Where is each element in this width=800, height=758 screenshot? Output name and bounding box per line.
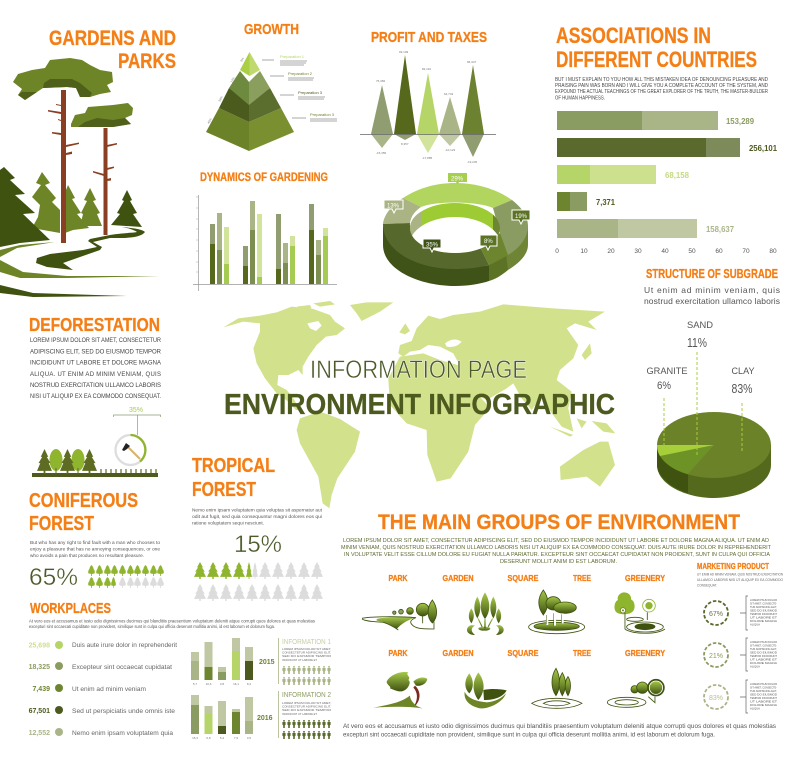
- labels: environment groups row 2: PARK: [388, 648, 408, 658]
- chart: dynamics of gardening bars: [193, 195, 337, 291]
- heading: deforestation: DEFORESTATION: [29, 315, 160, 335]
- chart: growth pyramid: 9%: [239, 56, 245, 62]
- text: coniferous paragraph: enjoy a pleasure that has no annoying consequences, or one: [30, 546, 161, 552]
- text: subgrade description: Ut enim ad minim veniam, quis: [644, 285, 780, 295]
- panel: information 1: INFORMATION 1: [282, 639, 331, 646]
- labels: subgrade pie: CLAY: [732, 366, 754, 376]
- chart: marketing rings: LOREM IPSUM DOLOR: [750, 598, 777, 602]
- heading: the main groups of environment: THE MAIN GROUPS OF ENVIRONMENT: [378, 511, 740, 534]
- chart: workplaces 2015 and 2016 bars: 16,1: [233, 682, 239, 686]
- chart: marketing rings: TEMPOR INCIDIDUNT: [750, 654, 777, 658]
- panel: information 2: CONSECTETUR ADIPISCING ELIT,: [282, 704, 331, 708]
- stat: 65 percent: 65%: [29, 564, 78, 591]
- chart: marketing rings: ALIQUA: [750, 664, 760, 668]
- chart: associations horizontal bars: 7,371: [596, 198, 616, 207]
- chart: associations horizontal bars: 158,637: [706, 225, 735, 234]
- icon: deforestation trees and axe: 35%: [129, 407, 143, 414]
- labels: subgrade pie: GRANITE: [646, 366, 688, 376]
- heading: gardens and parks: [49, 27, 176, 73]
- chart: marketing rings: SIT AMET, CONSECTE-: [750, 686, 777, 690]
- text: main groups paragraph: IN VOLUPTATE VELIT ESSE CILLUM DOLORE EU FUGIAT NULLA PARIATUR. EXCEPTEUR SINT OCCAECAT CUPIDATAT NON PROIDENT, SUNT IN CULPA QUI OFFICIA: [344, 552, 770, 558]
- chart: marketing rings: 67%: [709, 611, 723, 618]
- chart: marketing rings: LOREM IPSUM DOLOR: [750, 682, 777, 686]
- chart: workplaces 2015 and 2016 bars: 2015: [259, 659, 275, 666]
- chart: growth pyramid: Preparation 3: [298, 90, 323, 95]
- panel: information 1: LOREM IPSUM DOLOR SIT AMET,: [282, 647, 331, 651]
- heading: marketing product: MARKETING PRODUCT: [697, 562, 769, 571]
- icon: park path with trees: [362, 600, 437, 630]
- list: workplaces figures: [29, 641, 177, 737]
- chart: profit and taxes peaks: 76,382: [376, 79, 386, 83]
- chart: workplaces 2015 and 2016 bars: [191, 638, 275, 740]
- chart: workplaces 2015 and 2016 bars: 7,9: [234, 736, 238, 740]
- icon row: coniferous trees 65 percent: [88, 565, 164, 588]
- labels: environment groups row 2: GREENERY: [625, 648, 665, 658]
- heading: associations in different countries: ASSOCIATIONS IN: [556, 23, 711, 48]
- list: workplaces figures: 25,698: [29, 642, 50, 650]
- labels: environment groups row 1: PARK: [388, 573, 408, 583]
- chart: marketing rings: LOREM IPSUM DOLOR: [750, 640, 777, 644]
- chart: associations horizontal bars: 70: [742, 248, 750, 255]
- text: coniferous paragraph: But who has any right to find fault with a man who chooses to: [30, 540, 161, 545]
- heading: growth: GROWTH: [244, 21, 299, 38]
- chart: associations horizontal bars: 153,289: [726, 117, 755, 126]
- text: tropical paragraph: [192, 508, 323, 526]
- chart: associations horizontal bars: 50: [688, 248, 696, 255]
- chart: growth pyramid: Preparation 2: [288, 71, 313, 76]
- icon row: tropical trees 15 percent: [194, 562, 323, 601]
- panel: information 1: [278, 638, 332, 685]
- chart: 3D donut: 8%: [484, 239, 493, 245]
- stat: 15 percent: 15%: [234, 531, 282, 558]
- chart: profit and taxes peaks: -10,123: [445, 148, 456, 152]
- chart: workplaces 2015 and 2016 bars: 15,3: [192, 736, 198, 740]
- chart: marketing rings: TEMPOR INCIDIDUNT: [750, 612, 777, 616]
- chart: marketing rings: UT LABORE ET: [750, 616, 777, 620]
- panel: information 2: INFORMATION 2: [282, 692, 331, 699]
- panel: information 1: SED DO EIUSMOD TEMPOR: [282, 654, 332, 658]
- icon: garden leaves and hill: [465, 672, 507, 708]
- chart: marketing rings: SIT AMET, CONSECTE-: [750, 644, 777, 648]
- text: subgrade description: nostrud exercitation ullamco laboris: [644, 296, 780, 306]
- text: workplaces paragraph: At vero eos et accusamus et iusto odio dignissimos ducimus qui blanditiis praesentium voluptatum deleniti atque corrupti quos dolores et quas molestias: [29, 618, 316, 624]
- list: workplaces figures: Duis aute irure dolor in reprehenderit: [72, 642, 177, 649]
- illustration: pine trees and winding path: [0, 58, 160, 297]
- text: main groups paragraph: MINIM VENIAM, QUIS NOSTRUD EXERCITATION ULLAMCO LABORIS NISI UT ALIQUIP EX EA COMMODO CONSEQUAT. DUIS AUTE IRURE DOLOR IN REPREHENDERIT: [341, 545, 772, 551]
- icon: greenery round trees: [615, 592, 665, 633]
- list: workplaces figures: 12,552: [29, 730, 50, 737]
- icons: environment groups: [362, 590, 665, 708]
- heading: tropical forest: FOREST: [192, 479, 256, 501]
- chart: growth pyramid: 45%: [206, 117, 213, 124]
- panel: information 2: LOREM IPSUM DOLOR SIT AMET,: [282, 701, 331, 705]
- chart: associations horizontal bars: 40: [661, 248, 669, 255]
- labels: environment groups row 1: [388, 573, 665, 583]
- list: workplaces figures: 18,325: [29, 664, 50, 671]
- labels: environment groups row 2: [388, 648, 665, 658]
- chart: associations horizontal bars: 68,158: [665, 171, 690, 180]
- chart: subgrade 3D pie: [657, 352, 771, 498]
- chart: growth pyramid: [206, 52, 337, 151]
- text: main groups footer paragraph: [343, 723, 776, 738]
- chart: marketing rings: TUR ADIPISCING ELIT,: [750, 689, 777, 693]
- chart: marketing rings: TUR ADIPISCING ELIT,: [750, 647, 777, 651]
- title: information page: INFORMATION PAGE: [310, 356, 527, 384]
- chart: associations horizontal bars: 30: [634, 248, 642, 255]
- chart: marketing rings: SED DO EIUSMOD: [750, 692, 777, 696]
- labels: environment groups row 2: TREE: [573, 648, 591, 658]
- text: marketing paragraph: ULLAMCO LABORIS NISI UT ALIQUIP EX EA COMMODO: [697, 578, 783, 582]
- chart: marketing rings: TEMPOR INCIDIDUNT: [750, 696, 777, 700]
- text: deforestation paragraph: NOSTRUD EXERCITATION ULLAMCO LABORIS: [30, 383, 161, 389]
- text: deforestation paragraph: ADIPISCING ELIT, SED DO EIUSMOD TEMPOR: [30, 350, 162, 356]
- chart: profit and taxes peaks: [360, 50, 496, 164]
- chart: workplaces 2015 and 2016 bars: 5,7: [193, 682, 197, 686]
- chart: marketing rings: SED DO EIUSMOD: [750, 650, 777, 654]
- map: world map: [223, 301, 615, 508]
- chart: workplaces 2015 and 2016 bars: 3,5: [247, 736, 251, 740]
- chart: associations horizontal bars: 60: [715, 248, 723, 255]
- chart: associations horizontal bars: 0: [555, 248, 559, 255]
- chart: marketing rings: 83%: [709, 695, 723, 702]
- list: workplaces figures: Ut enim ad minim veniam: [72, 686, 146, 693]
- labels: subgrade pie: 11%: [687, 335, 707, 350]
- heading: coniferous forest: CONIFEROUS: [29, 490, 138, 512]
- heading: gardens and parks: GARDENS AND: [49, 27, 176, 50]
- chart: profit and taxes peaks: -17,885: [422, 156, 433, 160]
- chart: 3D donut: 13%: [387, 204, 400, 210]
- text: coniferous paragraph: [30, 540, 161, 558]
- icon: square with trees: [529, 590, 585, 634]
- heading: coniferous forest: FOREST: [29, 513, 94, 535]
- chart: marketing rings: SIT AMET, CONSECTE-: [750, 602, 777, 606]
- chart: marketing rings: ALIQUA: [750, 622, 760, 626]
- text: coniferous paragraph: who avoids a pain that produces no resultant pleasure.: [30, 553, 144, 558]
- chart: marketing rings: SED DO EIUSMOD: [750, 608, 777, 612]
- panel: information 2: [278, 691, 332, 739]
- chart: marketing rings: DOLORE MAGNA: [750, 703, 777, 707]
- labels: subgrade pie: 83%: [732, 381, 753, 396]
- icon: square leaves and eye ground: [532, 668, 582, 708]
- chart: 3D donut: 35%: [426, 242, 439, 248]
- chart: profit and taxes peaks: 64,743: [444, 92, 454, 96]
- text: associations paragraph: BUT I MUST EXPLAIN TO YOU HOW ALL THIS MISTAKEN IDEA OF DENOUNCING PLEASURE AND: [555, 77, 768, 83]
- chart: marketing rings: UT LABORE ET: [750, 700, 777, 704]
- text: workplaces paragraph: [29, 618, 316, 629]
- labels: environment groups row 1: TREE: [573, 573, 591, 583]
- chart: profit and taxes peaks: 96,347: [467, 60, 477, 64]
- chart: growth pyramid: 17%: [229, 76, 236, 84]
- text: main groups footer paragraph: At vero eos et accusamus et iusto odio dignissimos ducimus qui blanditiis praesentium voluptatum deleniti atque corrupti quos dolores et quas molestias: [343, 723, 776, 730]
- icon: greenery circles and spiral path: [607, 679, 664, 707]
- chart: growth pyramid: 36%: [217, 95, 224, 102]
- text: marketing paragraph: UT ENIM AD MINIM VENIAM, QUIS NOSTRUD EXERCITATION: [697, 572, 784, 576]
- chart: profit and taxes peaks: 8,357: [401, 142, 409, 146]
- chart: workplaces 2015 and 2016 bars: 3,8: [220, 682, 224, 686]
- text: tropical paragraph: odit aut fugit, sed quia consequuntur magni dolores eos qui: [192, 514, 322, 519]
- icon: garden trees: [467, 592, 504, 635]
- chart: growth pyramid: Preparation 1: [280, 54, 305, 59]
- list: workplaces figures: Nemo enim ipsam voluptatem quia: [72, 730, 173, 737]
- text: deforestation paragraph: LOREM IPSUM DOLOR SIT AMET, CONSECTETUR: [30, 338, 162, 344]
- text: main groups footer paragraph: excepturi sint occaecati cupiditate non provident, similique sunt in culpa qui officia deserunt mollitia animi, id est laborum et dolorum fuga.: [343, 732, 715, 738]
- text: deforestation paragraph: ALIQUA. UT ENIM AD MINIM VENIAM, QUIS: [30, 372, 161, 378]
- text: deforestation paragraph: [30, 338, 162, 400]
- labels: subgrade pie: SAND: [687, 320, 714, 330]
- text: associations paragraph: PRAISING PAIN WAS BORN AND I WILL GIVE YOU A COMPLETE ACCOUNT OF THE SYSTEM, AND: [555, 83, 768, 89]
- text: main groups paragraph: [341, 538, 772, 565]
- heading: tropical forest: TROPICAL: [192, 455, 275, 477]
- text: deforestation paragraph: INCIDIDUNT UT LABORE ET DOLORE MAGNA: [30, 360, 161, 366]
- labels: environment groups row 2: SQUARE: [508, 648, 539, 658]
- text: tropical paragraph: ratione voluptatem sequi nesciunt.: [192, 520, 264, 526]
- heading: associations in different countries: [556, 23, 757, 72]
- heading: coniferous forest: [29, 490, 138, 535]
- text: associations paragraph: [555, 77, 768, 102]
- text: workplaces paragraph: excepturi sint occaecati cupiditate non provident, similique sunt in culpa qui officia deserunt mollitia animi, id est laborum et dolorum fuga.: [29, 624, 275, 629]
- chart: profit and taxes peaks: 82,119: [422, 67, 431, 71]
- chart: marketing rings: DOLORE MAGNA: [750, 619, 777, 623]
- chart: workplaces 2015 and 2016 bars: 6,8: [206, 736, 211, 740]
- chart: marketing rings: UT LABORE ET: [750, 658, 777, 662]
- heading: dynamics of gardening: DYNAMICS OF GARDENING: [200, 170, 328, 184]
- text: main groups paragraph: LOREM IPSUM DOLOR SIT AMET, CONSECTETUR ADIPISCING ELIT, SED DO EIUSMOD TEMPOR INCIDIDUNT UT LABORE ET DOLORE MAGNA ALIQUA. UT ENIM AD: [343, 538, 769, 544]
- chart: associations horizontal bars: 256,101: [749, 144, 778, 153]
- list: workplaces figures: 7,439: [32, 686, 50, 693]
- text: marketing paragraph: CONSEQUAT.: [697, 584, 717, 588]
- labels: subgrade pie: 6%: [657, 380, 671, 392]
- chart: workplaces 2015 and 2016 bars: 10,6: [206, 682, 212, 686]
- chart: workplaces 2015 and 2016 bars: 5,4: [220, 736, 224, 740]
- labels: environment groups row 1: GREENERY: [625, 573, 665, 583]
- text: tropical paragraph: Nemo enim ipsam voluptatem quia voluptas sit aspernatur aut: [192, 508, 323, 512]
- chart: marketing rings: [704, 596, 777, 713]
- title: environment infographic: ENVIRONMENT INFOGRAPHIC: [224, 389, 615, 421]
- labels: environment groups row 1: SQUARE: [508, 573, 539, 583]
- chart: profit and taxes peaks: -19,245: [467, 160, 478, 164]
- panel: information 2: SED DO EIUSMOD TEMPOR: [282, 708, 332, 712]
- chart: associations horizontal bars: [555, 111, 778, 255]
- text: marketing paragraph: [697, 572, 784, 588]
- text: subgrade description: [644, 285, 780, 306]
- text: associations paragraph: OF HUMAN HAPPINESS.: [555, 96, 605, 102]
- list: workplaces figures: Sed ut perspiciatis unde omnis iste: [72, 708, 175, 715]
- chart: 3D donut: [383, 173, 530, 286]
- labels: environment groups row 2: GARDEN: [442, 648, 474, 658]
- heading: workplaces: WORKPLACES: [30, 601, 111, 617]
- list: workplaces figures: Excepteur sint occaecat cupidatat: [72, 664, 172, 671]
- labels: subgrade pie: [646, 320, 754, 396]
- icon: deforestation trees and axe: [32, 407, 160, 477]
- list: workplaces figures: 67,501: [29, 708, 50, 715]
- heading: profit and taxes: PROFIT AND TAXES: [371, 30, 487, 46]
- chart: associations horizontal bars: 20: [607, 248, 615, 255]
- panel: information 1: CONSECTETUR ADIPISCING ELIT,: [282, 650, 331, 654]
- chart: 3D donut: 29%: [451, 176, 464, 182]
- panel: information 1: INCIDIDUNT UT LABORE ET: [282, 658, 317, 662]
- chart: associations horizontal bars: 10: [580, 248, 588, 255]
- chart: marketing rings: TUR ADIPISCING ELIT,: [750, 605, 777, 609]
- text: associations paragraph: EXPOUND THE ACTUAL TEACHINGS OF THE GREAT EXPLORER OF THE TRUTH, THE MASTER-BUILDER: [555, 89, 768, 95]
- chart: marketing rings: ALIQUA: [750, 706, 760, 710]
- chart: marketing rings: 21%: [709, 653, 723, 660]
- chart: profit and taxes peaks: 93,109: [399, 50, 409, 54]
- chart: associations horizontal bars: 80: [769, 248, 777, 255]
- chart: marketing rings: DOLORE MAGNA: [750, 661, 777, 665]
- heading: tropical forest: [192, 455, 275, 501]
- chart: workplaces 2015 and 2016 bars: 8,4: [247, 682, 251, 686]
- icon: park windblown tree: [373, 672, 427, 708]
- text: deforestation paragraph: NISI UT ALIQUIP EX EA COMMODO CONSEQUAT.: [30, 394, 161, 400]
- panel: information 2: INCIDIDUNT UT LABORE ET: [282, 712, 317, 716]
- chart: workplaces 2015 and 2016 bars: 2016: [257, 715, 273, 722]
- labels: environment groups row 1: GARDEN: [442, 573, 474, 583]
- chart: growth pyramid: Preparation 3: [310, 112, 335, 117]
- text: main groups paragraph: DESERUNT MOLLIT ANIM ID EST LABORUM.: [500, 559, 617, 565]
- chart: profit and taxes peaks: -15,355: [376, 151, 387, 155]
- chart: 3D donut: 19%: [515, 214, 528, 220]
- heading: gardens and parks: PARKS: [118, 50, 176, 73]
